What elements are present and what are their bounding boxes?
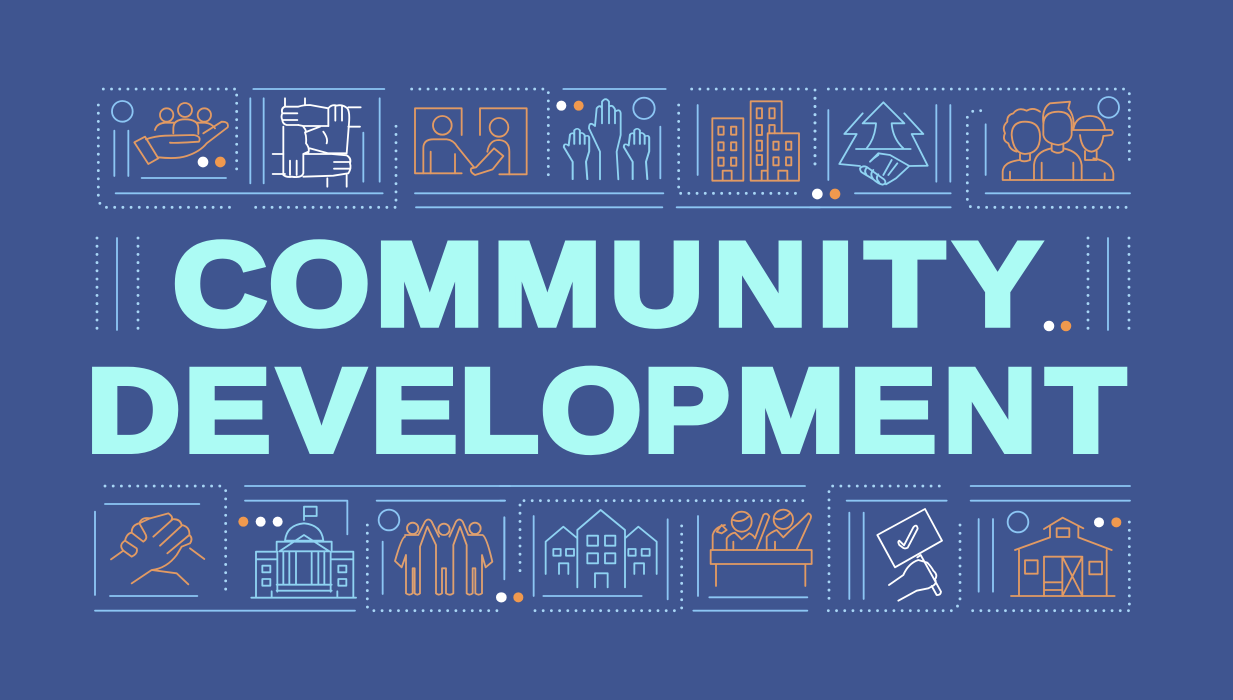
- icon: trees and handshake: [839, 102, 928, 185]
- bottom strip left: handclasp, government building, people: [95, 486, 510, 611]
- title line: community: COMMUNITY: [173, 219, 1041, 350]
- icon: people meeting in windows: [415, 108, 527, 175]
- icon: panel of speakers at table: [711, 510, 812, 586]
- icon: city buildings: [712, 101, 799, 181]
- icon: diverse people group: [1003, 102, 1113, 180]
- bottom strip middle: houses and debate panel: [497, 486, 812, 611]
- icon: three raised hands: [564, 99, 649, 179]
- top strip left: hand and hands: [98, 89, 396, 207]
- title: [87, 219, 1125, 477]
- icon: clasped hands: [111, 513, 204, 584]
- icon: group with raised hands: [395, 519, 492, 595]
- title accent dots: [1044, 321, 1071, 331]
- icon: hand holding checkmark sign: [877, 509, 942, 601]
- icon: four interlocked hands: [273, 98, 361, 187]
- icon: hand holding people: [134, 103, 228, 164]
- top strip right: trees handshake and community group: [810, 89, 1130, 207]
- title line: development: DEVELOPMENT: [87, 345, 1125, 477]
- icon: barn: [1011, 518, 1115, 596]
- top strip middle: meeting, raised hands, buildings: [412, 89, 820, 207]
- icon: row of houses: [546, 510, 657, 587]
- icon: government building with dome: [251, 507, 356, 598]
- bottom strip right: voting sign and barn: [828, 486, 1130, 611]
